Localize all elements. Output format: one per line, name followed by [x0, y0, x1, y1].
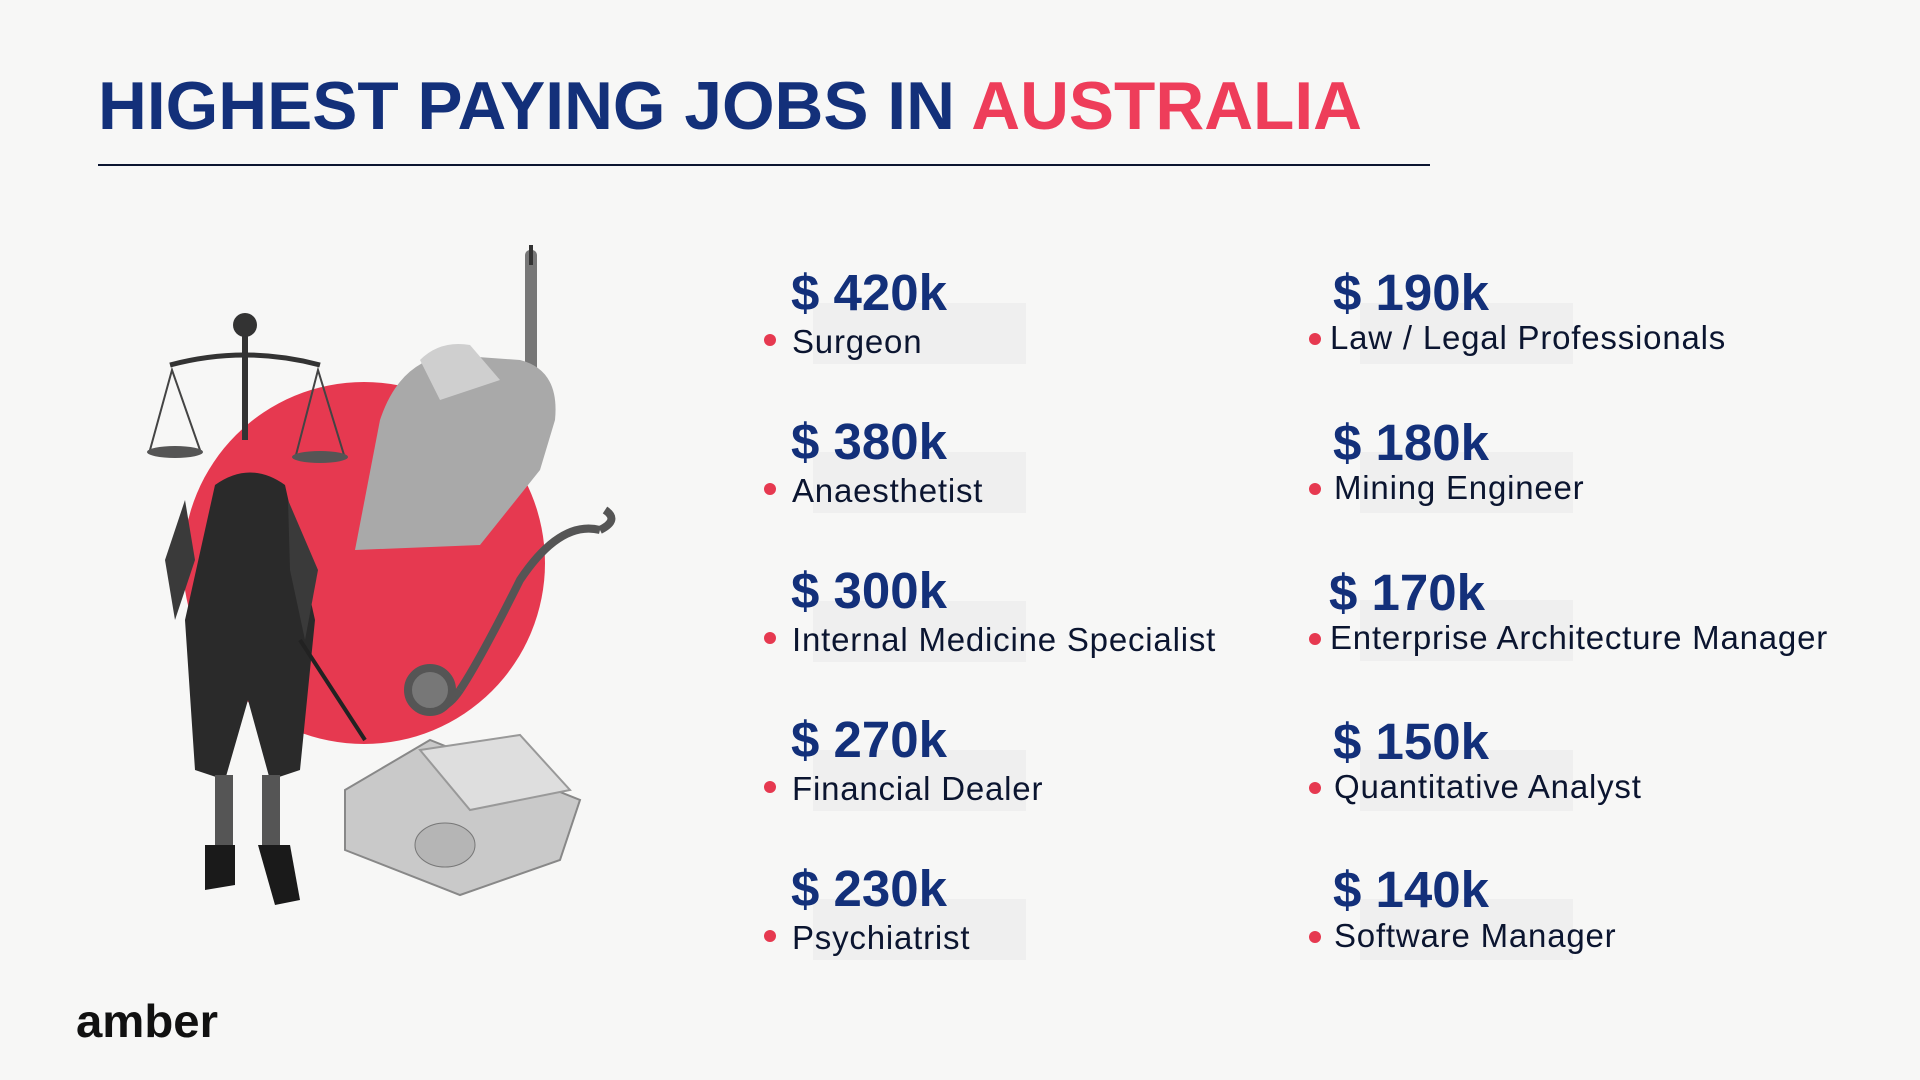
item: Law / Legal Professionals: $ 190k [1333, 264, 1490, 321]
item: Mining Engineer: $ 180k [1333, 414, 1490, 471]
item: Psychiatrist [764, 860, 1026, 960]
item: Anaesthetist: $ 380k [791, 413, 948, 470]
left column items [764, 264, 1216, 960]
glove hand with syringe [355, 245, 556, 550]
item: Quantitative Analyst [1309, 713, 1642, 811]
item: Enterprise Architecture Manager: Enterprise Architecture Manager [1330, 619, 1828, 656]
right column items [1309, 264, 1828, 960]
item: Surgeon: $ 420k [791, 264, 948, 321]
item: Surgeon [764, 264, 1026, 364]
money stack [345, 735, 580, 895]
red circle [183, 382, 545, 744]
item: Financial Dealer: $ 270k [791, 711, 948, 768]
item: Mining Engineer: Mining Engineer [1334, 469, 1584, 506]
item: Financial Dealer [764, 711, 1043, 811]
item: Law / Legal Professionals [1309, 264, 1726, 364]
item: Software Manager: $ 140k [1333, 861, 1490, 918]
item: Quantitative Analyst: Quantitative Analyst [1334, 768, 1642, 805]
item: Internal Medicine Specialist: Internal Medicine Specialist [792, 621, 1216, 658]
stethoscope [408, 510, 611, 712]
item: Surgeon: Surgeon [792, 323, 922, 360]
item: Anaesthetist: Anaesthetist [792, 472, 983, 509]
item: Software Manager: Software Manager [1334, 917, 1616, 954]
item: Mining Engineer [1309, 414, 1584, 513]
title: HIGHEST PAYING JOBS IN AUSTRALIA [98, 68, 1362, 144]
logo: amber: amber [76, 995, 218, 1047]
illustration: professions collage [147, 245, 611, 905]
item: Enterprise Architecture Manager [1309, 564, 1828, 661]
item: Quantitative Analyst: $ 150k [1333, 713, 1490, 770]
scales and headless suit figure [147, 313, 365, 905]
item: Enterprise Architecture Manager: $ 170k [1329, 564, 1486, 621]
item: Psychiatrist: Psychiatrist [792, 919, 970, 956]
item: Internal Medicine Specialist [764, 562, 1216, 662]
item: Software Manager [1309, 861, 1616, 960]
item: Internal Medicine Specialist: $ 300k [791, 562, 948, 619]
item: Financial Dealer: Financial Dealer [792, 770, 1043, 807]
item: Anaesthetist [764, 413, 1026, 513]
item: Law / Legal Professionals: Law / Legal Professionals [1330, 319, 1726, 356]
item: Psychiatrist: $ 230k [791, 860, 948, 917]
